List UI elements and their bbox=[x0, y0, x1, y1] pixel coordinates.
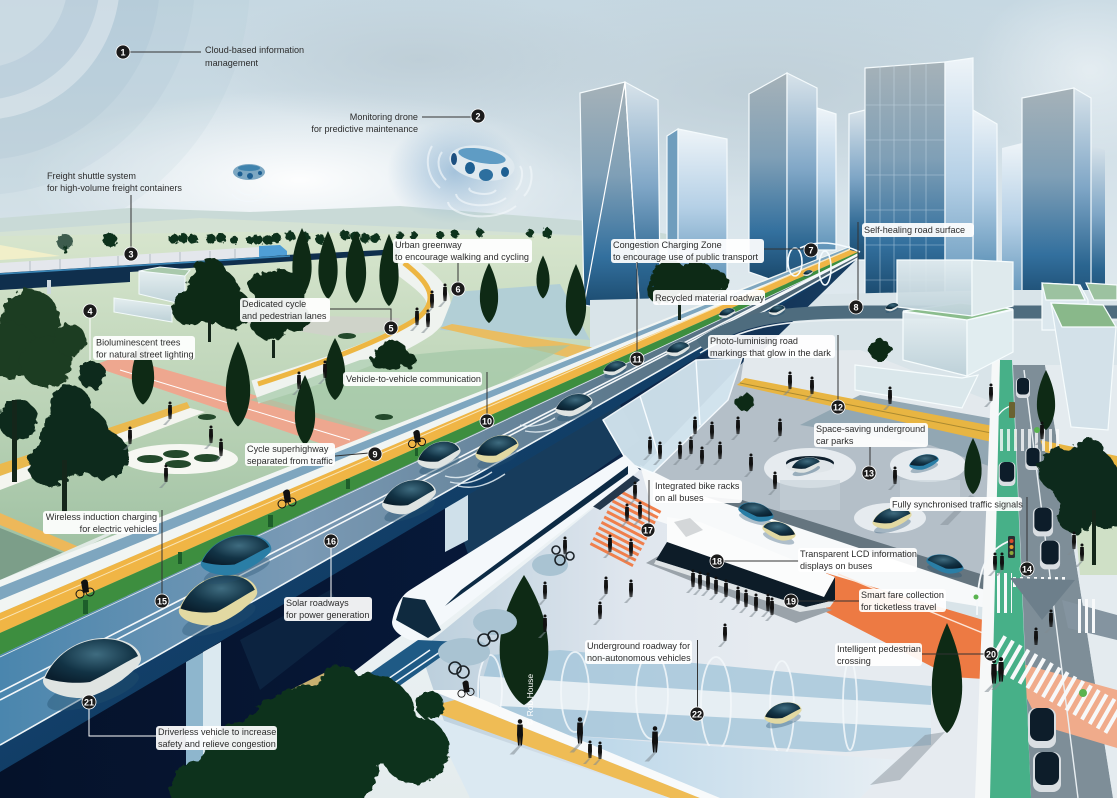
callout 11: recycled material roadway: Recycled material roadway bbox=[655, 293, 765, 303]
distant hills bbox=[0, 206, 700, 250]
callout 20: pedestrian crossing: Intelligent pedestrian bbox=[837, 644, 921, 654]
orange pedestrian band bbox=[826, 573, 1000, 680]
callout 10: vehicle-to-vehicle bbox=[343, 372, 494, 428]
under highway shadow bbox=[0, 258, 858, 798]
callout 16: solar roadways: Solar roadways bbox=[286, 598, 349, 608]
callout 19: smart fare collection: Smart fare collection bbox=[861, 590, 944, 600]
callout 4: bioluminescent trees bbox=[83, 304, 195, 360]
salmon cycle superhighway bbox=[92, 356, 376, 450]
callout 10: vehicle-to-vehicle: Vehicle-to-vehicle communication bbox=[346, 374, 481, 384]
callout 1: cloud-based information bbox=[116, 45, 304, 68]
callout 17: bike racks: 17 bbox=[643, 525, 653, 535]
glass cube building near shuttle bbox=[114, 267, 190, 322]
callout 4: bioluminescent trees: Bioluminescent trees bbox=[96, 338, 181, 348]
callout 6: urban greenway bbox=[393, 239, 532, 296]
callout 21: driverless vehicle: 21 bbox=[84, 697, 94, 707]
callout 16: solar roadways: 16 bbox=[326, 536, 336, 546]
right side ground bbox=[590, 290, 1117, 798]
autonomous monorail bbox=[392, 455, 640, 641]
callout 16: solar roadways: for power generation bbox=[286, 610, 369, 620]
callout 7: congestion charging: Congestion Charging Zone bbox=[613, 240, 722, 250]
callout 22: underground roadway: 22 bbox=[692, 709, 702, 719]
callout 7: congestion charging bbox=[611, 239, 818, 263]
highway cars bbox=[43, 270, 899, 719]
callout 18: LCD displays: displays on buses bbox=[800, 561, 873, 571]
curved bridge roadway bbox=[700, 312, 1117, 353]
orange zebra crossing bbox=[610, 500, 640, 558]
callout 3: freight shuttle: 3 bbox=[128, 249, 134, 259]
callout 9: cycle superhighway: 9 bbox=[372, 449, 378, 459]
callout 19: smart fare collection: for ticketless travel bbox=[861, 602, 936, 612]
callout 15: wireless induction charging: for electric vehicles bbox=[80, 524, 157, 534]
drone glow bbox=[387, 120, 523, 224]
callout 13: underground car parks: car parks bbox=[816, 436, 854, 446]
sidewalk by bus bbox=[640, 465, 1000, 610]
drone large bbox=[447, 141, 517, 185]
plaza cars bbox=[738, 454, 964, 580]
callout 2: monitoring drone: Monitoring drone bbox=[350, 112, 418, 122]
callout 8: self-healing road bbox=[849, 222, 974, 314]
callout 20: pedestrian crossing: 20 bbox=[986, 649, 996, 659]
callout 21: driverless vehicle: Driverless vehicle to increase bbox=[158, 727, 276, 737]
vertical road cars bbox=[999, 378, 1061, 792]
callout 14: traffic signals: 14 bbox=[1022, 564, 1032, 574]
pedestrians bbox=[123, 284, 1084, 765]
callout 22: underground roadway: non-autonomous vehicles bbox=[587, 653, 691, 663]
callout 21: driverless vehicle: safety and relieve congestion bbox=[158, 739, 276, 749]
callout 6: urban greenway: to encourage walking and cycling bbox=[395, 252, 529, 262]
callout 5: cycle and pedestrian lanes bbox=[240, 298, 398, 335]
callout 6: urban greenway: 6 bbox=[455, 284, 461, 294]
callout 3: freight shuttle: for high-volume freight containers bbox=[47, 183, 182, 193]
drone signal arcs bbox=[428, 146, 532, 216]
callout 18: LCD displays: Transparent LCD information bbox=[800, 549, 917, 559]
right glass blocks bbox=[1042, 283, 1117, 430]
callout 2: monitoring drone: for predictive maintenance bbox=[311, 124, 418, 134]
highway deck bands bbox=[0, 246, 858, 745]
bridge pillars bbox=[186, 484, 468, 770]
electric bus bbox=[646, 517, 835, 623]
callout 12: photo-luminising markings: Photo-luminising road bbox=[710, 336, 798, 346]
callout 22: underground roadway bbox=[585, 640, 704, 721]
callout 4: bioluminescent trees: for natural street lighting bbox=[96, 350, 194, 360]
plaza light patches bbox=[737, 350, 1117, 470]
callout 20: pedestrian crossing: crossing bbox=[837, 656, 871, 666]
cloud signal rings bbox=[0, 0, 250, 250]
callout 7: congestion charging: to encourage use of public transport bbox=[613, 252, 759, 262]
callout 5: cycle and pedestrian lanes: and pedestrian lanes bbox=[242, 311, 327, 321]
monorail track bbox=[190, 470, 640, 798]
bike racks bbox=[438, 546, 574, 678]
callout 2: monitoring drone bbox=[311, 109, 485, 134]
congestion charging gantries bbox=[788, 243, 860, 285]
callout 1: cloud-based information: 1 bbox=[120, 47, 126, 57]
callout 5: cycle and pedestrian lanes: Dedicated cycle bbox=[242, 299, 306, 309]
callout 1: cloud-based information: management bbox=[205, 58, 259, 68]
underground tunnel bbox=[470, 650, 931, 755]
callout 9: cycle superhighway: separated from traffic bbox=[247, 456, 333, 466]
callout 13: underground car parks: Space-saving underground bbox=[816, 424, 925, 434]
callout 14: traffic signals: Fully synchronised traffic signals bbox=[892, 500, 1023, 510]
freight shuttle system bbox=[0, 245, 400, 294]
callout 3: freight shuttle: Freight shuttle system bbox=[47, 171, 136, 181]
callout 15: wireless induction charging bbox=[43, 510, 169, 608]
callout 1: cloud-based information: Cloud-based information bbox=[205, 45, 304, 55]
callout 18: LCD displays bbox=[710, 548, 917, 572]
intersection zebra crossings bbox=[990, 440, 1117, 720]
callout 10: vehicle-to-vehicle: 10 bbox=[482, 416, 492, 426]
glass cube tower stack bbox=[855, 260, 1013, 408]
lower left plot bbox=[0, 510, 160, 590]
callout 8: self-healing road: Self-healing road surface bbox=[864, 225, 965, 235]
callout 8: self-healing road: 8 bbox=[853, 302, 859, 312]
callout 17: bike racks: on all buses bbox=[655, 493, 704, 503]
callout 2: monitoring drone: 2 bbox=[475, 111, 481, 121]
induction charging waves bbox=[445, 418, 568, 487]
callout 7: congestion charging: 7 bbox=[808, 245, 814, 255]
callout 21: driverless vehicle bbox=[82, 695, 277, 750]
traffic signals bbox=[974, 402, 1087, 697]
cyclists bbox=[76, 430, 474, 697]
callout 12: photo-luminising markings bbox=[708, 335, 845, 414]
callout 3: freight shuttle bbox=[47, 171, 182, 261]
callout 12: photo-luminising markings: markings that glow in the dark bbox=[710, 348, 831, 358]
flower beds bbox=[122, 333, 393, 474]
roadside tree line bbox=[57, 228, 552, 254]
drone small bbox=[232, 164, 268, 202]
callout 5: cycle and pedestrian lanes: 5 bbox=[388, 323, 394, 333]
callout 13: underground car parks bbox=[814, 423, 928, 480]
callout 11: recycled material roadway bbox=[630, 262, 765, 366]
callout 13: underground car parks: 13 bbox=[864, 468, 874, 478]
far ground left bbox=[0, 232, 640, 640]
credit: © Rob House bbox=[525, 674, 535, 725]
callout 19: smart fare collection: 19 bbox=[786, 596, 796, 606]
callout 15: wireless induction charging: Wireless induction charging bbox=[46, 512, 157, 522]
highway fascia bbox=[0, 258, 858, 772]
underpass ground patches bbox=[240, 405, 640, 700]
callout 11: recycled material roadway: 11 bbox=[632, 354, 642, 364]
callout 9: cycle superhighway: Cycle superhighway bbox=[247, 444, 329, 454]
callout 6: urban greenway: Urban greenway bbox=[395, 240, 462, 250]
callout 17: bike racks: Integrated bike racks bbox=[655, 481, 740, 491]
callout 22: underground roadway: Underground roadway for bbox=[587, 641, 690, 651]
upper plaza road bbox=[690, 495, 1000, 610]
pale field at far left bbox=[0, 245, 60, 260]
cypress trees bbox=[132, 228, 1055, 733]
glass transit station bbox=[603, 358, 742, 473]
callout 18: LCD displays: 18 bbox=[712, 556, 722, 566]
tunnel car bbox=[764, 702, 802, 731]
tree trunks bbox=[12, 296, 1096, 565]
callout 16: solar roadways bbox=[284, 534, 372, 621]
callout 15: wireless induction charging: 15 bbox=[157, 596, 167, 606]
callout 9: cycle superhighway bbox=[245, 443, 382, 466]
underground car park pits bbox=[764, 448, 966, 533]
callout 4: bioluminescent trees: 4 bbox=[87, 306, 93, 316]
lower blue paving and yellow path bbox=[430, 690, 900, 798]
callout 12: photo-luminising markings: 12 bbox=[833, 402, 843, 412]
callout 14: traffic signals bbox=[890, 497, 1034, 576]
callout 19: smart fare collection bbox=[784, 589, 946, 612]
skyscrapers bbox=[580, 58, 1105, 315]
side paths and blue pool bbox=[0, 284, 620, 490]
electric vertical road bbox=[975, 360, 1117, 798]
callout 17: bike racks bbox=[641, 480, 742, 537]
tower window grid bbox=[865, 63, 945, 305]
urban greenway path bbox=[255, 262, 439, 392]
cypress shadows bbox=[870, 495, 975, 785]
right plaza bbox=[640, 355, 1000, 590]
park trees bbox=[0, 258, 1117, 798]
callout 20: pedestrian crossing bbox=[835, 643, 998, 666]
green hedge posts bbox=[83, 448, 418, 614]
bus plaza bbox=[420, 470, 1000, 798]
